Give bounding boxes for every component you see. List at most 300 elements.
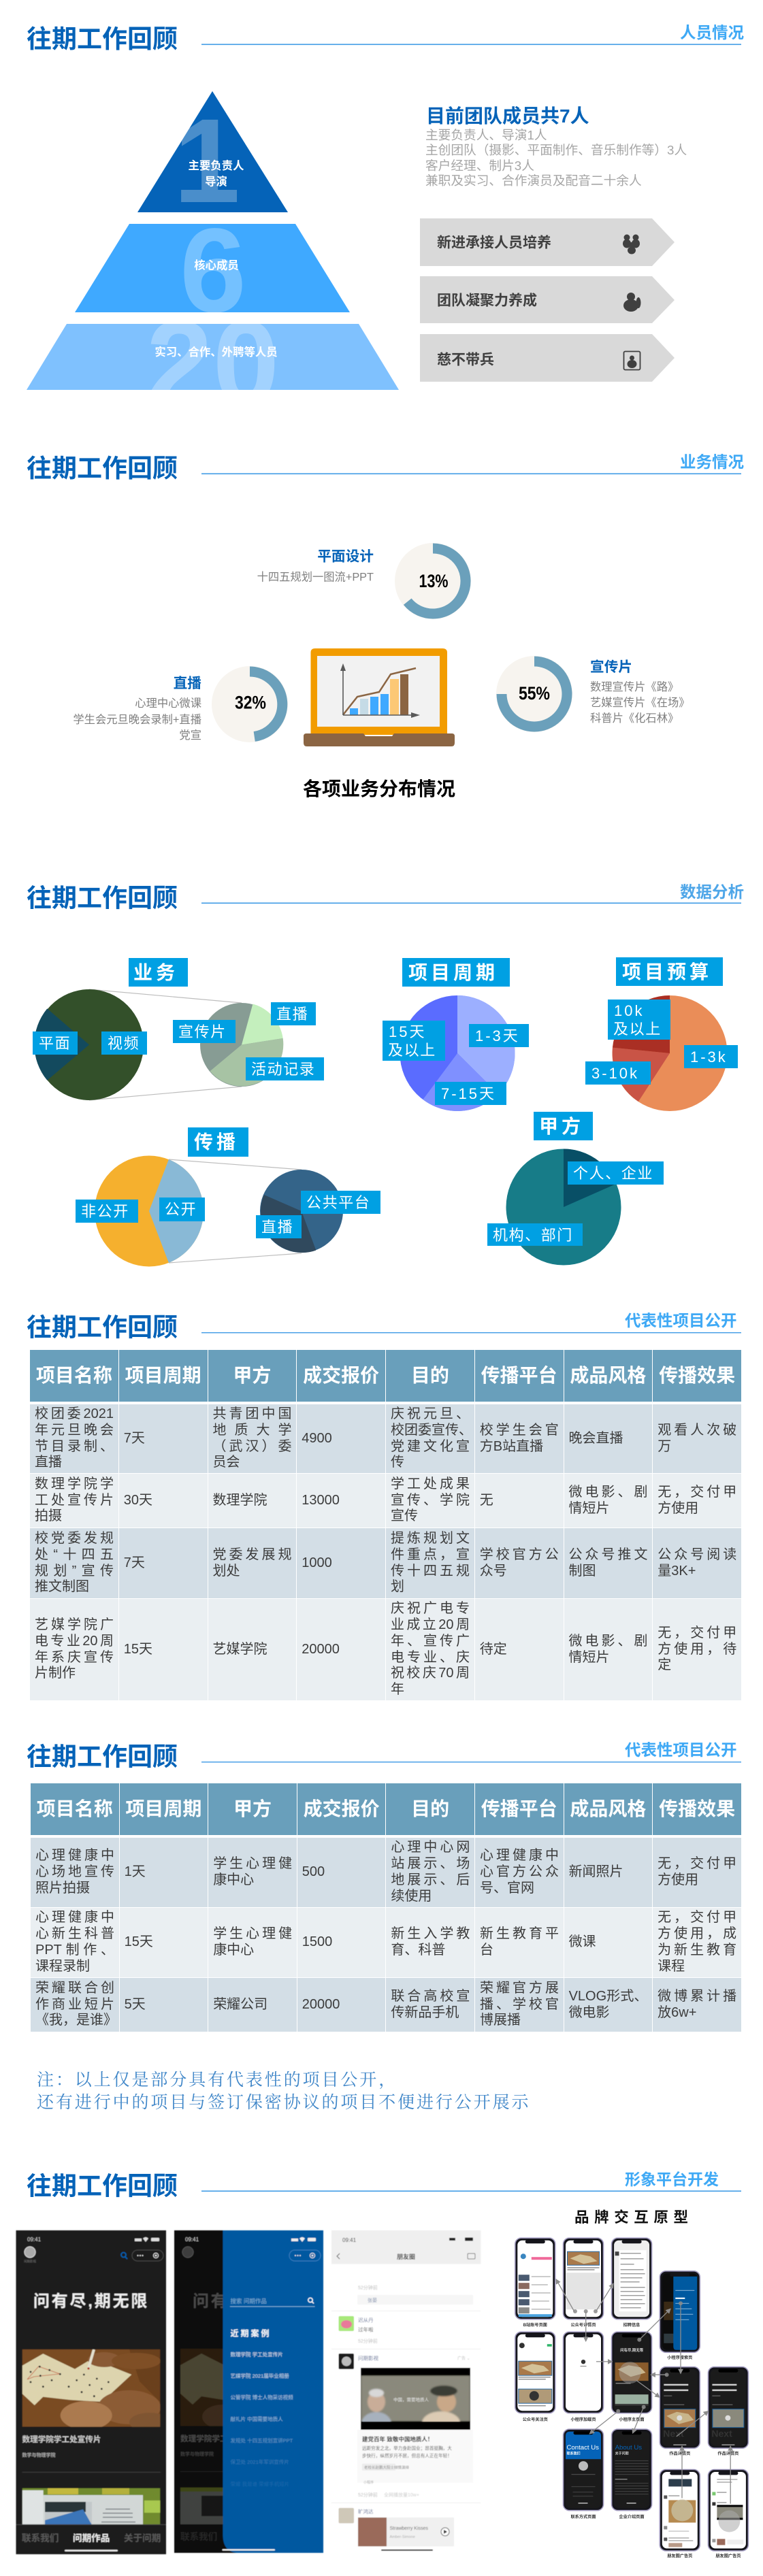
pie labels: budget: 1-3k [690,1048,728,1066]
table: representative projects 2: 项目名称 [37,1798,113,1819]
drawer status icons [291,2237,316,2242]
ad copy: 建党百年 致敬中国地质人！ [362,2436,433,2443]
table: representative projects 2: 照片拍摄 [35,1881,90,1896]
table: representative projects 2: 心新生科普 [35,1926,114,1941]
table: representative projects 2: 目的 [411,1798,449,1819]
donut: graphic design 13% [395,543,471,619]
table: representative projects 1: 处“十四五 [35,1547,114,1562]
pie: business detail [200,1003,283,1087]
dim photo [180,2349,223,2426]
table: representative projects 2: 成交报价 [304,1798,380,1819]
table: representative projects 2: 传播平台 [481,1798,557,1819]
table: representative projects 2: 方使用，成 [658,1926,736,1941]
text: graphic design: 平面设计 [317,548,374,565]
recent cases list: 献礼片 中国需要地质人 [230,2415,283,2422]
team summary text: 主创团队（摄影、平面制作、音乐制作等）3人 [425,143,687,157]
table: representative projects 2: 甲方 [233,1798,272,1819]
pyramid middle tier: 核心成员 [194,259,239,272]
table: representative projects 2: 心场地宣传 [35,1864,114,1879]
mock labels [523,2322,741,2558]
pie labels: business: 直播 [276,1006,308,1023]
table: representative projects 1: 推文制图 [35,1579,89,1594]
table: representative projects 1: 1000 [302,1555,332,1570]
table: representative projects 2: 育、科普 [391,1943,445,1958]
table: representative projects 1: 传播平台 [481,1365,557,1386]
donut: promo film 55%: 55% [519,683,550,704]
phone: moments feed: 张晏 [368,2297,377,2303]
mock: mini program home [612,2332,652,2413]
table: representative projects 1: 微电影、剧 [569,1485,648,1500]
table: representative projects 1: 无，交付甲 [658,1625,736,1640]
pie labels: budget [585,1000,738,1085]
ad copy [357,2430,473,2485]
bottom navigation: 联系我们 [22,2532,59,2543]
section header: projects 1 [27,1312,741,1342]
phone: moments feed: 全网播放量10w+ [384,2492,419,2498]
ad copy: 远距穷发之北，举力身赴国业；昂首挺胸，大 [362,2445,452,2451]
phone: moments feed: 52分钟前 [358,2492,378,2498]
phone: moments feed: 52分钟前 [358,2285,378,2290]
drawer capsule [289,2250,321,2261]
pie labels: cycle: 及以上 [388,1042,436,1059]
table: representative projects 1: 共青团中国 [212,1406,291,1421]
mock: moments ad A [660,2470,700,2551]
table: representative projects 2: PPT制作、 [35,1943,114,1958]
table: representative projects 1: 片制作 [35,1666,76,1681]
table: representative projects 2: 地展示、后 [391,1872,470,1887]
table: representative projects 1 [30,1350,741,1700]
section label: 形象平台开发 [625,2170,719,2188]
pyramid top tier: 主要负责人 [189,159,244,172]
mock: search drawer [660,2271,700,2352]
table: representative projects 1: 15天 [124,1642,152,1657]
section: data analysis [27,883,744,1267]
phone: moments feed: 朋友圈 [397,2253,415,2260]
project photo [22,2349,170,2432]
table: representative projects 1: 工处宣传片 [35,1493,114,1508]
pie labels: business: 活动记录 [251,1061,315,1078]
text: live: 心理中心微课 [135,697,201,710]
video card [361,2368,470,2435]
flow arrows [556,2279,730,2504]
text: live: 学生会元旦晚会录制+直播 [73,714,201,726]
table: representative projects 1: 拍摄 [35,1508,62,1523]
table: representative projects 2: 传新品手机 [391,2004,459,2019]
mock labels: 公众号详情页 [570,2322,596,2328]
mock labels: 联系方式页面 [570,2514,596,2520]
table: representative projects 1: 30天 [124,1493,152,1508]
heading: project cycle [402,958,510,987]
bottom navigation [16,2524,166,2554]
heading: budget: 项目预算 [622,961,712,982]
table: representative projects 2: 博展播 [480,2013,521,2028]
table: representative projects 1: 情短片 [569,1501,610,1516]
phone: moments feed: 迟从丹 [358,2317,374,2323]
table: representative projects 1: 7天 [124,1431,145,1446]
table: representative projects 2: 站展示、场 [391,1856,470,1871]
phone: moments feed: 旷鸿达 [358,2508,374,2515]
table: representative projects 1: 业成立20周 [391,1617,470,1632]
mock labels: 招聘信息 [623,2322,640,2328]
table: representative projects 1: 件重点，宣 [391,1547,470,1562]
arrow card: cohesion: 团队凝聚力养成 [437,293,537,309]
table: representative projects 2: 播、学校官 [480,1997,559,2012]
pie labels: business: 宣传片 [178,1023,227,1040]
table: representative projects 1: 校团委2021 [35,1406,114,1421]
search field: 搜索 问期作品 [230,2298,267,2305]
mock: mini program home: 问有尽,期无限 [620,2347,644,2353]
mock: official account article [564,2238,603,2319]
table: representative projects 1: 无 [480,1493,493,1508]
table: representative projects 2 [31,1783,741,2032]
recent cases list: 保卫处 2021年军训宣传片 [230,2458,289,2465]
table: representative projects 1: （武汉）委 [212,1438,291,1453]
music card: Amber-Simone [389,2535,415,2539]
table: representative projects 2: 无，交付甲 [658,1856,736,1871]
music card: Strawberry Kisses [389,2526,428,2531]
table: representative projects 1: 电专业、庆 [391,1649,470,1664]
table: representative projects 1: 众号 [480,1564,507,1579]
mock: work detail A [660,2367,700,2448]
table: representative projects 1: 年、宣传广 [391,1634,470,1649]
brand prototype diagram [515,2209,748,2558]
section: team [27,24,743,390]
pie: client [506,1149,621,1266]
table: representative projects 2: 作商业短片 [35,1997,114,2012]
title: 往期工作回顾 [27,455,178,482]
table: representative projects 1: 电专业20周 [35,1634,114,1649]
phone: moments feed: 52分钟前 [358,2338,378,2344]
mock labels: 朋友圈广告页 [667,2553,692,2558]
table: representative projects 1: 传十四五规 [391,1564,470,1579]
table: representative projects 2: 传播效果 [659,1798,735,1819]
pie labels: spread: 公共平台 [306,1194,370,1211]
phone: moments feed: 过年啦 [358,2326,374,2332]
table: representative projects 2: 15天 [125,1934,153,1949]
table: representative projects 1: 年元旦晚会 [35,1423,114,1438]
section label: 人员情况 [680,24,744,42]
table: representative projects 1: 4900 [302,1431,332,1446]
heading: client: 甲方 [539,1116,584,1137]
table: representative projects 1: 庆祝元旦、 [391,1406,470,1421]
pie labels: budget: 10k [614,1002,644,1019]
table: representative projects 1: 艺媒学院 [212,1642,267,1657]
pie labels: client: 个人、企业 [573,1165,653,1182]
donut: promo film 55% [496,656,572,732]
ad copy: 老校长赵鹏大院士倾情演绎 [364,2464,410,2470]
section: business [27,453,744,799]
header rule [201,2191,741,2192]
project name: 数理学院学工处宣传片 [22,2434,101,2444]
text: promo film [590,659,690,725]
table: representative projects 1: 提炼规划文 [391,1531,470,1546]
pie labels: cycle: 7-15天 [441,1085,496,1102]
table: representative projects 1: 数理学院 [212,1493,267,1508]
table: representative projects 1: 划 [391,1579,404,1594]
table: representative projects 2: 成品风格 [570,1798,646,1819]
table: representative projects 1: 公众号阅读 [658,1547,736,1562]
phone: mini program home: 09:41 [27,2236,42,2243]
table: representative projects 1: 13000 [302,1493,340,1508]
pie: budget [613,995,727,1111]
table: representative projects 2: 心官方公众 [480,1864,559,1879]
table: representative projects 1: 员会 [212,1455,240,1470]
table: representative projects 2: 心理健康中 [480,1848,559,1863]
pie labels: business: 平面 [39,1035,71,1052]
pie labels: spread: 非公开 [81,1203,129,1220]
title: 往期工作回顾 [27,1313,178,1342]
pie labels: cycle: 1-3天 [475,1027,520,1044]
table: representative projects 1: 党建文化宣 [391,1438,470,1453]
table: representative projects 1: 庆祝广电专 [391,1601,470,1616]
table: representative projects 2: 台 [480,1943,493,1958]
mock: about page: About Us [615,2444,642,2451]
table: representative projects 2: 微课 [569,1934,596,1949]
table: representative projects 1: 艺媒学院广 [35,1617,114,1632]
heading: business [129,958,188,987]
mock labels: 小程序加载页 [570,2417,596,2422]
table: representative projects 1: 7天 [124,1555,145,1570]
pyramid top tier: 导演 [205,176,227,188]
table: representative projects 1: 观看人次破 [658,1423,736,1438]
team summary text [425,105,687,188]
dim nav text: 联系我们 [180,2531,217,2542]
table: representative projects 1: 待定 [480,1642,507,1657]
table: representative projects 2: 号、官网 [480,1881,534,1896]
table: representative projects 1: 校团委宣传、 [391,1423,472,1438]
heading: business: 业务 [133,962,178,983]
dim captions: 数学与物理学院 [180,2451,214,2457]
table: representative projects 1: 传播效果 [659,1365,735,1386]
logo: 问期影视 [24,2259,36,2264]
donut: live 32% [212,666,288,742]
pie labels: cycle: 15天 [389,1023,426,1040]
recent cases list: 荣耀 我是谁 荣耀手机短片 [230,2481,289,2488]
phone: search drawer [174,2230,323,2553]
table: representative projects 1: 万 [658,1438,671,1453]
mock: contact page: 联系我们 [566,2451,581,2456]
table: representative projects 2: 新生入学教 [391,1926,470,1941]
search icon [121,2252,127,2259]
table: representative projects 2: 荣耀官方展 [480,1981,559,1996]
table: representative projects 2: 康中心 [213,1872,254,1887]
mock: moments ad B [708,2470,748,2551]
table: representative projects 2: 课程录制 [35,1959,90,1974]
pie: spread detail [260,1170,343,1253]
table: representative projects 2: VLOG形式、 [569,1989,648,2004]
arrow card: leadership [420,334,675,382]
table: representative projects 1: 划处 [212,1564,240,1579]
project client: 数学与物理学院 [22,2452,56,2458]
mock: about page: 关于问期 [615,2451,629,2456]
table: representative projects 2: 康中心 [213,1943,254,1958]
pie group: budget [585,957,738,1111]
phone: moments feed [331,2230,481,2554]
mock: recruiting info [612,2238,652,2319]
table: representative projects 2: 微博累计播 [658,1989,736,2004]
recent cases list: 发规处 十四五规划宣讲PPT [230,2437,293,2444]
table: representative projects 2: 新闻照片 [569,1864,623,1879]
table: representative projects 1: 祝校庆70周 [391,1666,470,1681]
dim captions: 数理学院学工 [180,2434,228,2443]
pyramid top tier: 1 [174,95,240,228]
table: representative projects 2: 项目周期 [125,1798,201,1819]
table: representative projects 1: 规划”宣传 [35,1564,114,1579]
video card: 中国，需要地质人 [393,2396,429,2402]
section label: 代表性项目公开 [625,1741,736,1759]
section label: 数据分析 [680,883,744,901]
phone: moments feed: 广告 ⌄ [457,2356,470,2361]
text: live: 党宣 [179,729,201,742]
mock: about page [612,2429,652,2511]
donut: graphic design 13%: 13% [419,571,448,591]
recent cases list: 公管学院 博士人物采访视频 [230,2394,293,2400]
table: representative projects 1: 公众号推文 [569,1547,648,1562]
table: representative projects 1: 目的 [411,1365,449,1386]
pie labels: client: 机构、部门 [493,1227,573,1244]
title: 往期工作回顾 [27,2172,178,2200]
caption: 各项业务分布情况 [303,778,455,799]
table: representative projects 1: 党委发展规 [212,1547,291,1562]
title: 往期工作回顾 [27,1743,178,1770]
table: representative projects 1: 校党委发规 [35,1531,114,1546]
ad copy: 步快行，纵然岁月不居，但总有人正在年轻！ [362,2452,452,2459]
table: representative projects 2: 5天 [125,1997,146,2012]
table: representative projects 1: 项目周期 [125,1365,201,1386]
title: 往期工作回顾 [27,885,178,912]
table: representative projects 1: 微电影、剧 [569,1634,648,1649]
mock: contact page: Contact Us [566,2444,599,2451]
avatar: user [339,2508,354,2523]
pyramid top tier [137,91,288,212]
table: representative projects 1: 节目录制、 [35,1438,114,1453]
arrow card: leadership: 慈不带兵 [437,352,494,367]
recent cases heading: 近期案例 [230,2328,272,2338]
pie labels: budget: 3-10k [591,1065,639,1082]
text: promo film: 科普片《化石林》 [590,712,679,725]
table: representative projects 2: 新生教育平 [480,1926,559,1941]
heading: spread [188,1127,248,1157]
team summary text: 兼职及实习、合作演员及配音二十余人 [425,174,642,188]
table: representative projects 2: 心理中心网 [391,1840,470,1855]
pyramid middle tier: 6 [180,204,246,337]
table: representative projects 2: 课程 [658,1959,685,1974]
recent cases list: 数理学院 学工处宣传片 [230,2351,283,2358]
bottom navigation: 关于问期 [124,2532,161,2543]
table: representative projects 1: 成交报价 [303,1365,379,1386]
table: representative projects 1: 数理学院学 [35,1476,114,1491]
table: representative projects 2: 心理健康中 [35,1848,114,1863]
heading: budget [616,957,723,986]
phone: mini program home [16,2230,170,2554]
table: representative projects 2: 《我，是谁》 [35,2013,117,2028]
pie group: spread [76,1127,380,1267]
mock labels: 企业介绍页面 [619,2514,645,2520]
title: 往期工作回顾 [27,25,178,53]
table: representative projects 1: 量3K+ [658,1564,696,1579]
pyramid bottom tier [27,324,399,390]
table: representative projects 1: 晚会直播 [569,1431,623,1446]
table: representative projects 2: 心理健康中 [35,1910,114,1925]
mock: bilibili page [515,2238,555,2319]
section header: projects 2 [27,1741,741,1770]
recent cases list [230,2351,293,2488]
table: representative projects 2: 无，交付甲 [658,1910,736,1925]
text: graphic design: 十四五规划一图流+PPT [257,572,374,584]
table: representative projects 1: 甲方 [233,1365,271,1386]
icon: person in frame [623,351,640,370]
avatar: studio [339,2354,354,2369]
footnote: 还有进行中的项目与签订保密协议的项目不便进行公开展示 [37,2093,530,2112]
dim captions [180,2434,228,2472]
pie: spread main [95,1155,302,1267]
table: representative projects 1: 年 [391,1682,404,1697]
mock: loading page [564,2332,603,2413]
arrow card: cohesion [420,276,675,323]
mock: contact page [564,2429,603,2511]
table: representative projects 2: 20000 [302,1997,340,2012]
table: representative projects 1: 方B站直播 [480,1438,543,1453]
dim second photo [180,2488,223,2524]
icon: three people [623,234,640,254]
table: representative projects 2: 续使用 [391,1889,432,1904]
mock: work detail B: Next [711,2428,732,2439]
mock: follow page [515,2332,555,2413]
capsule menu [132,2250,163,2261]
arrow card: training: 新进承接人员培养 [437,234,551,250]
table: representative projects 1: 地质大学 [212,1423,291,1438]
icon: laptop with growth chart [304,648,455,746]
text: promo film: 数理宣传片《路》 [590,681,679,693]
table: representative projects 1: 20000 [302,1642,340,1657]
table: representative projects 2: 为新生教育 [658,1943,736,1958]
table: representative projects 2: 荣耀公司 [213,1997,267,2012]
heading: spread: 传播 [194,1132,239,1153]
table: representative projects 2: 1天 [125,1864,146,1879]
table: representative projects 2: 500 [302,1864,325,1879]
phone: search drawer: 09:41 [185,2236,199,2243]
pie labels: business [33,1002,324,1080]
recent cases list: 艺媒学院 2021届毕业相册 [230,2372,289,2379]
ad copy: 小程序 [363,2480,374,2485]
text: live: 直播 [174,676,201,691]
mock labels: 小程序主页面 [619,2417,645,2422]
text: promo film: 宣传片 [590,659,632,675]
mock labels: 作品详情页 [717,2451,738,2456]
footnote [37,2070,530,2112]
team summary text: 主要负责人、导演1人 [425,128,547,142]
table: representative projects 1: 传 [391,1455,404,1470]
mock labels: 朋友圈广告页 [715,2553,741,2558]
table: representative projects 2: 微电影 [569,2004,610,2019]
mock labels: B站账号页面 [523,2322,547,2328]
mock: work detail B [708,2367,748,2448]
bottom navigation: 问期作品 [73,2533,110,2543]
table: representative projects 1: 学工处成果 [391,1476,470,1491]
team summary text: 目前团队成员共7人 [426,105,589,127]
mock labels: 小程序搜索页 [667,2355,692,2360]
diagram title: 品牌交互原型 [574,2209,694,2226]
pie group: business [33,958,324,1100]
header rule [201,44,741,45]
table: representative projects 1: 无，交付甲 [658,1485,736,1500]
text: graphic design [257,548,374,584]
pie group: project cycle [383,958,529,1111]
search field [230,2298,314,2307]
table: representative projects 1: 宣传、学院 [391,1493,470,1508]
pyramid bottom tier: 20 [146,297,279,430]
pie labels: client [487,1161,664,1246]
